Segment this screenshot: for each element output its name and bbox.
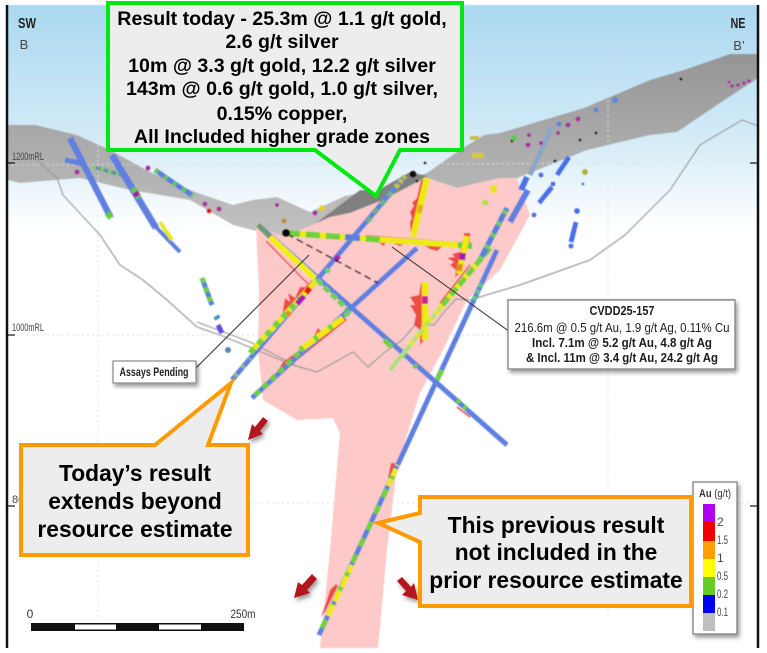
callout: today's result (green) — [108, 3, 462, 196]
legend: Au grade: 0.5 — [717, 569, 728, 583]
legend: Au grade: 2 — [717, 515, 724, 529]
hole: far-left group — [65, 138, 122, 218]
section labels SW B NE B': SW — [18, 15, 37, 32]
legend: Au grade: 0.1 — [717, 605, 728, 619]
leader lines — [196, 247, 510, 368]
hole: second SW diagonal — [252, 248, 417, 398]
label: CVDD25-157 intercept: CVDD25-157 — [590, 303, 654, 318]
label: CVDD25-157 intercept: Incl. 7.1m @ 5.2 g/t Au, 4.8 g/t Ag — [532, 335, 712, 350]
red direction arrows — [248, 417, 418, 600]
callout: previous result not included (orange) — [378, 497, 691, 606]
label: CVDD25-157 intercept — [508, 300, 735, 369]
scale bar: 0 — [27, 607, 34, 621]
legend: Au grade: 0.2 — [717, 587, 728, 601]
red grade histograms — [266, 180, 472, 617]
callout: today's result (green): Result today - 25.3m @ 1.1 g/t gold, — [117, 8, 447, 30]
callout: today's result (green): 143m @ 0.6 g/t gold, 1.0 g/t silver, — [126, 78, 438, 100]
hole: long steep to depth — [319, 127, 552, 635]
elevation labels: 80 — [12, 494, 24, 506]
terrain band — [7, 54, 758, 237]
hole: NE cluster — [521, 157, 588, 248]
callout: today's result (green): 10m @ 3.3 g/t gold, 12.2 g/t silver — [128, 55, 436, 77]
callout: today's result (green): All Included higher grade zones — [134, 126, 430, 148]
resource shell: pink — [256, 178, 530, 648]
callout: today's result (green): 2.6 g/t silver — [225, 31, 339, 53]
section labels SW B NE B': B — [20, 37, 28, 52]
hole: pale green to NE — [390, 208, 507, 370]
callout: extends beyond resource estimate (orange): extends beyond — [48, 488, 222, 514]
section labels SW B NE B': NE — [730, 15, 746, 32]
callout: today's result (green): 0.15% copper, — [217, 103, 347, 125]
callout: previous result not included (orange): not included in the — [455, 539, 657, 565]
hole: long through-going to SW — [232, 176, 405, 380]
legend: Au grade: Au (g/t) — [699, 488, 731, 500]
elevation labels — [12, 151, 44, 506]
topography contour lines — [37, 120, 758, 372]
sky background — [7, 5, 758, 230]
hole: upslope near-surface — [155, 170, 193, 196]
callout: previous result not included (orange): prior resource estimate — [429, 567, 683, 593]
scale bar: 250m — [230, 607, 256, 621]
drill holes — [65, 78, 751, 635]
surface collar dots — [74, 78, 751, 237]
legend: Au grade: 1.5 — [717, 533, 728, 547]
hole: left second — [112, 155, 180, 252]
dashed section line — [287, 234, 378, 283]
hole: yellow lower — [422, 282, 428, 340]
hole: short yellow upper — [413, 178, 427, 237]
scale bar — [27, 607, 256, 631]
callout: previous result not included (orange): This previous result — [448, 512, 665, 538]
legend: Au grade: 1 — [717, 551, 724, 565]
legend: Au grade — [693, 482, 737, 634]
label: CVDD25-157 intercept: 216.6m @ 0.5 g/t Au, 1.9 g/t Ag, 0.11% Cu — [514, 320, 730, 335]
label: CVDD25-157 intercept: & Incl. 11m @ 3.4 g/t Au, 24.2 g/t Ag — [526, 350, 718, 365]
section labels SW B NE B' — [18, 15, 746, 53]
section labels SW B NE B': B’ — [733, 38, 745, 53]
label: assays pending — [113, 361, 196, 383]
callout: extends beyond resource estimate (orange): resource estimate — [37, 516, 233, 542]
hole: short segments — [202, 278, 231, 353]
hole: main intercept CVDD25-157 — [286, 233, 472, 246]
hole: yellow upper right — [459, 236, 467, 274]
callout: extends beyond resource estimate (orange): Today’s result — [59, 460, 211, 486]
callout: extends beyond resource estimate (orange) — [21, 383, 248, 555]
elevation labels: 1000mRL — [12, 322, 44, 334]
elevation labels: 1200mRL — [12, 151, 44, 163]
hole: yellow diagonal NW to SE — [258, 225, 507, 445]
label: assays pending: Assays Pending — [120, 365, 188, 379]
